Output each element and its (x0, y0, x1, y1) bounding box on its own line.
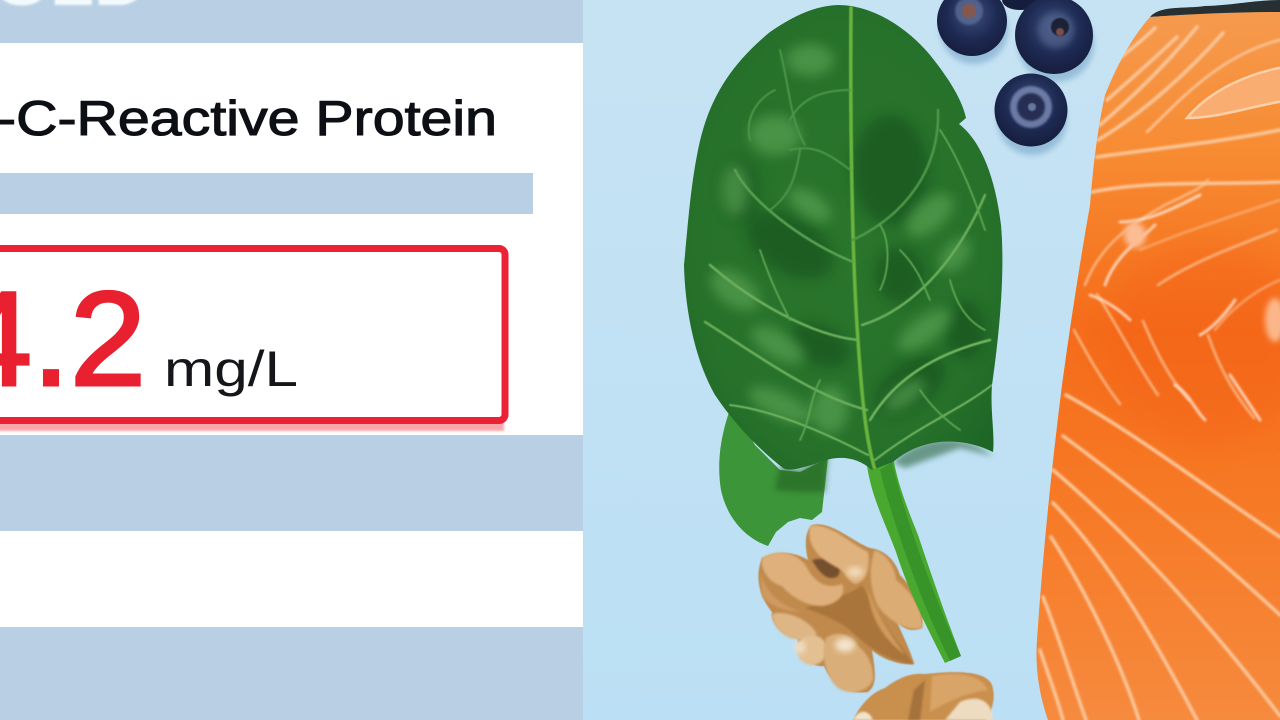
salmon flesh (1036, 12, 1280, 720)
leaf stem (866, 455, 961, 663)
salmon skin edge (1150, 0, 1280, 17)
salmon fat lines (1040, 27, 1280, 720)
walnut base (758, 524, 923, 693)
inner divider band (0, 173, 533, 214)
unit: mg/L: mg/L (164, 341, 298, 397)
berry shadows (940, 0, 1094, 155)
walnut lobe: left (762, 552, 843, 606)
empty white row (0, 531, 583, 627)
icon: small spinach leaf (719, 404, 828, 546)
icon: spinach leaf (684, 5, 1002, 663)
red result box (0, 248, 505, 420)
leaf shadow (893, 439, 993, 468)
walnut lobe: right (871, 550, 922, 629)
dark quilted patches (722, 115, 985, 426)
top header band (0, 0, 583, 43)
salmon white marbling (1090, 195, 1260, 420)
walnut: lower (853, 672, 994, 720)
walnut: upper (758, 524, 923, 693)
bottom row band (0, 627, 583, 720)
walnut dark centre (812, 559, 840, 578)
callout: highlighted result value (0, 248, 505, 431)
light quilted patches (703, 44, 977, 434)
walnut lobe: lower left (772, 613, 817, 639)
walnut lobe: top (809, 526, 869, 584)
salmon saturated core (1176, 261, 1236, 278)
background: light blue food surface (583, 0, 1280, 720)
panel: lab report (0, 0, 583, 720)
icon: walnuts (758, 524, 994, 720)
icon: salmon fillet (1036, 0, 1280, 720)
berry: left (937, 0, 1007, 56)
berry: partly cropped at top (1002, 0, 1038, 10)
icon: blueberries (937, 0, 1094, 155)
walnut lobe: small (797, 635, 827, 665)
leaf shading and veins (703, 8, 992, 470)
heading: C-Reactive Protein: -C-Reactive Protein (0, 92, 497, 146)
leaf blade (684, 5, 1002, 470)
berry: bottom (994, 74, 1068, 146)
white result card (0, 43, 583, 435)
salmon pale belly patch (1187, 66, 1280, 118)
row band (0, 435, 583, 531)
walnut ridge (805, 585, 914, 664)
walnut lobe: bottom (824, 634, 873, 692)
berry: right (1015, 0, 1093, 74)
